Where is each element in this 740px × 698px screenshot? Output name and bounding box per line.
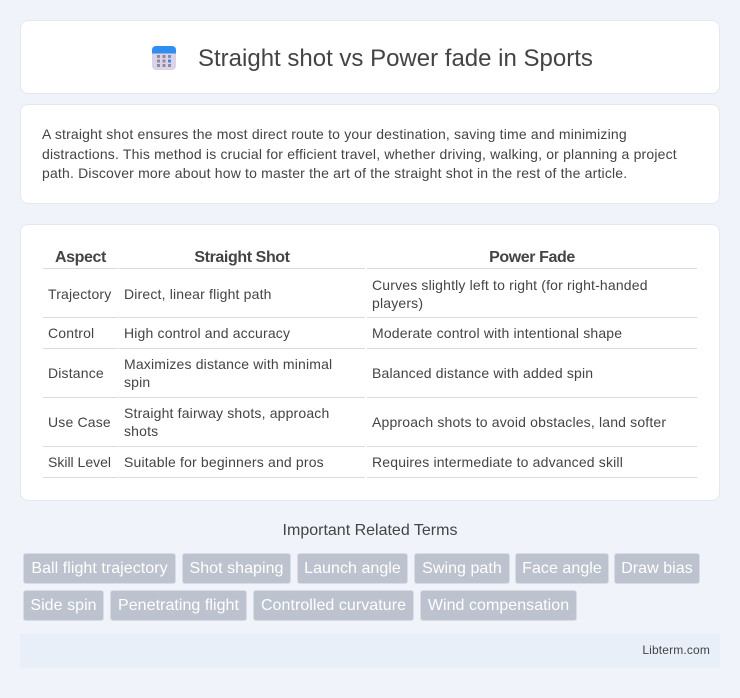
intro paragraph — [42, 126, 677, 181]
row: Use Case: shots — [124, 423, 158, 439]
related term tags: Penetrating flight — [118, 597, 239, 614]
footer credit: Libterm.com — [642, 643, 710, 657]
related term tags — [23, 553, 700, 621]
related term tags: Face angle — [522, 560, 602, 577]
row: Distance: Maximizes distance with minimal — [124, 356, 332, 372]
row: Skill Level — [48, 454, 623, 470]
row: Distance: Balanced distance with added spin — [372, 365, 593, 381]
row: Skill Level: Skill Level — [48, 454, 111, 470]
related term tags: Ball flight trajectory — [31, 560, 168, 577]
row: Trajectory: Direct, linear flight path — [124, 286, 272, 302]
row: Skill Level: Requires intermediate to advanced skill — [372, 454, 623, 470]
row: Trajectory: players) — [372, 295, 423, 311]
row: Distance — [48, 356, 593, 390]
related term tags: Draw bias — [621, 560, 693, 577]
footer bar — [20, 634, 720, 668]
intro text panel — [20, 104, 720, 204]
row: Distance: spin — [124, 374, 150, 390]
row: Use Case: Use Case — [48, 414, 111, 430]
related term tags: Side spin — [30, 597, 97, 614]
row: Skill Level: Suitable for beginners and pros — [124, 454, 324, 470]
row: Control: Control — [48, 325, 94, 341]
row: Use Case: Approach shots to avoid obstacles, land softer — [372, 414, 666, 430]
related term tags: Swing path — [422, 560, 502, 577]
row: Trajectory — [48, 277, 648, 311]
row: Control: High control and accuracy — [124, 325, 290, 341]
table header: Aspect — [55, 249, 106, 266]
related term tags: Controlled curvature — [261, 597, 406, 614]
table header: Straight Shot — [194, 249, 290, 266]
header panel — [20, 20, 720, 94]
row: Use Case: Straight fairway shots, approach — [124, 405, 329, 421]
row: Use Case — [48, 405, 666, 439]
related term tags: Shot shaping — [189, 560, 284, 577]
related term tags: Launch angle — [304, 560, 401, 577]
row: Control — [48, 325, 622, 341]
row: Trajectory: Curves slightly left to right (for right-handed — [372, 277, 648, 293]
related term tags: Wind compensation — [428, 597, 569, 614]
intro paragraph: A straight shot ensures the most direct route to your destination, saving time and minimizing — [42, 126, 627, 142]
table header: Power Fade — [489, 249, 575, 266]
table header — [55, 249, 575, 266]
row: Control: Moderate control with intentional shape — [372, 325, 622, 341]
intro paragraph: path. Discover more about how to master the art of the straight shot in the rest of the article. — [42, 165, 627, 181]
row: Distance: Distance — [48, 365, 104, 381]
related terms heading: Important Related Terms — [283, 522, 457, 539]
intro paragraph: distractions. This method is crucial for efficient travel, whether driving, walking, or planning a project — [42, 146, 677, 162]
title: Straight shot vs Power fade in Sports — [198, 45, 593, 72]
comparison table panel — [20, 224, 720, 501]
row: Trajectory: Trajectory — [48, 286, 111, 302]
icon: calendar — [152, 46, 176, 70]
